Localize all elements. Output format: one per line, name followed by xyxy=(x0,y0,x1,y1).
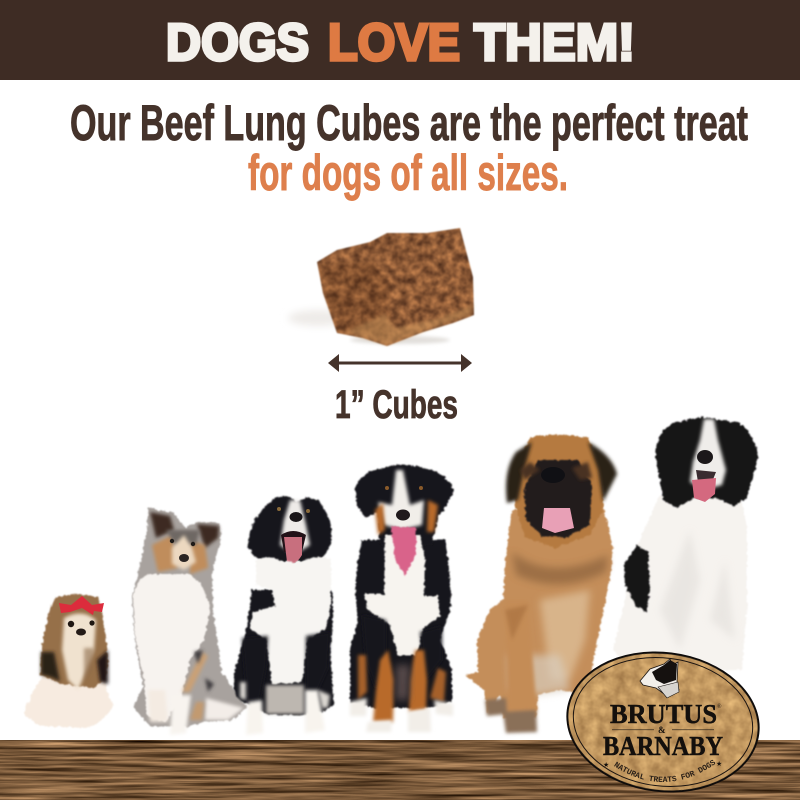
logo dog head xyxy=(640,659,679,698)
headline text xyxy=(70,95,748,201)
title: THEM! xyxy=(474,14,635,72)
title: DOGS xyxy=(166,14,309,72)
red bow xyxy=(59,596,104,615)
logo registered mark: ® xyxy=(717,703,722,710)
wood floor xyxy=(0,740,800,800)
dogs line-up xyxy=(24,417,758,735)
logo wordmark: BARNABY xyxy=(603,731,723,761)
title: LOVE xyxy=(328,14,460,72)
logo stars xyxy=(603,760,722,769)
logo wordmark: BRUTUS xyxy=(610,699,717,729)
logo wordmark xyxy=(603,699,723,761)
logo: brutus and barnaby xyxy=(566,652,760,792)
size label: 1” Cubes xyxy=(335,383,458,427)
logo stars: ★ xyxy=(716,760,722,768)
dog 2: sheltie xyxy=(132,508,247,735)
dog 3: border collie xyxy=(234,496,334,735)
logo tagline: NATURAL TREATS FOR DOGS xyxy=(614,760,716,782)
logo stars: ★ xyxy=(603,761,609,769)
dog 1: shih tzu xyxy=(24,594,114,728)
dog 4: bernese xyxy=(350,465,454,732)
title xyxy=(166,14,635,72)
beef lung cube xyxy=(288,228,474,346)
header banner xyxy=(0,0,800,80)
dog 6: landseer xyxy=(613,417,758,670)
dog 5: mastiff xyxy=(465,435,617,733)
headline orange line: for dogs of all sizes. xyxy=(248,145,568,201)
logo wordmark: & xyxy=(658,725,666,735)
size arrow xyxy=(328,354,472,372)
